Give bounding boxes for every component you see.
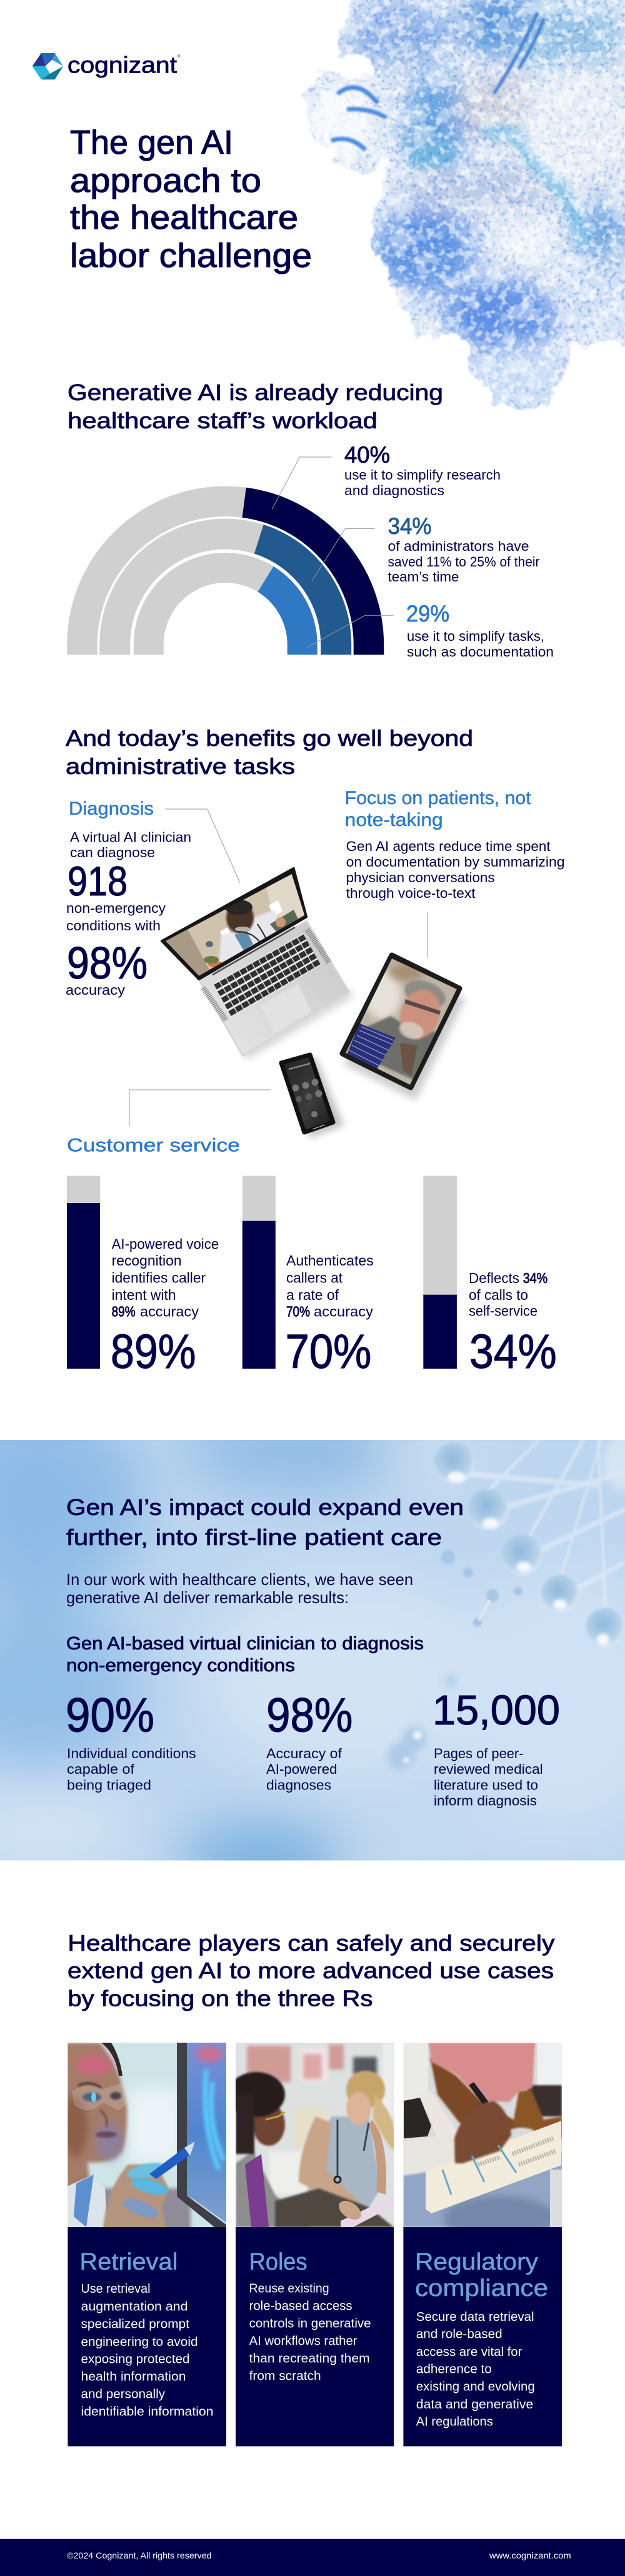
stat: 98% accuracy: AI-powered xyxy=(266,1761,338,1777)
panel: retrieval: exposing protected xyxy=(81,2353,190,2367)
stat: 29% xyxy=(406,601,554,660)
callout: focus on patients: note-taking xyxy=(345,810,443,830)
photo: clinician with patient xyxy=(228,2043,395,2227)
bar chart: 89% voice recognition: AI-powered voice xyxy=(112,1236,219,1252)
stat: 34% xyxy=(388,513,540,585)
bar chart: 70% authentication: Authenticates xyxy=(286,1252,374,1269)
inner ring: 29% xyxy=(134,553,318,655)
bar chart: 70% authentication: 70% xyxy=(286,1325,371,1379)
leader line: focus on patients xyxy=(427,912,428,958)
bar chart: 34% deflection: 34% xyxy=(523,1270,548,1286)
bar chart: 89% voice recognition: 89% xyxy=(111,1325,196,1379)
callout: diagnosis: accuracy xyxy=(66,982,125,998)
panel: roles: role-based access xyxy=(249,2300,352,2313)
subheading: virtual clinician: non-emergency conditions xyxy=(66,1656,295,1676)
panel: retrieval: identifiable information xyxy=(81,2405,214,2419)
leader line: customer service xyxy=(129,1090,271,1126)
bar chart: 89% voice recognition: intent with xyxy=(112,1287,176,1303)
panel: roles: controls in generative xyxy=(249,2317,371,2331)
heading: first-line patient care: Gen AI’s impact could expand even xyxy=(66,1494,464,1520)
panel: regulatory compliance: Regulatory xyxy=(415,2249,538,2275)
bar chart: 89% voice recognition: accuracy xyxy=(140,1304,199,1320)
subheading: customer service: Customer service xyxy=(67,1135,240,1156)
heading: benefits: administrative tasks xyxy=(66,753,295,779)
bar chart: 89% voice recognition: identifies caller xyxy=(112,1270,206,1286)
panel: retrieval xyxy=(68,2227,226,2446)
panel: retrieval: and personally xyxy=(81,2388,165,2402)
image: tablet with patient xyxy=(342,955,466,1100)
panel: roles: from scratch xyxy=(249,2370,321,2383)
stat: 40%: and diagnostics xyxy=(344,483,444,498)
stat: 98% accuracy: Accuracy of xyxy=(266,1746,342,1761)
panel: retrieval: Use retrieval xyxy=(81,2282,150,2296)
stat: 34%: 34% xyxy=(388,513,431,539)
panel: retrieval: Retrieval xyxy=(80,2249,178,2275)
subheading: virtual clinician: Gen AI-based virtual clinician to diagnosis xyxy=(66,1634,424,1654)
title: The gen AI xyxy=(70,124,233,161)
bar chart: 89% voice recognition: 89% xyxy=(112,1304,136,1320)
panel: regulatory compliance: existing and evolving xyxy=(416,2380,535,2394)
stat: 90% triaged: capable of xyxy=(67,1761,135,1777)
bar chart: 89% voice recognition: recognition xyxy=(112,1252,182,1269)
chart: concentric half-donut xyxy=(67,486,384,655)
heading: first-line patient care: further, into first-line patient care xyxy=(66,1524,442,1550)
callout: diagnosis: 918 xyxy=(68,858,128,904)
callout: focus on patients: Gen AI agents reduce time spent xyxy=(346,838,551,854)
bar chart: 34% deflection: 34% xyxy=(469,1325,557,1379)
stat: 40% xyxy=(344,442,501,498)
panel: first-line patient care background xyxy=(0,1440,625,1861)
title: the healthcare xyxy=(70,199,298,236)
stat: 98% accuracy xyxy=(266,1688,352,1793)
stat: 90% triaged: being triaged xyxy=(67,1777,151,1793)
photo: researcher at screen xyxy=(62,2043,226,2232)
heading: benefits xyxy=(66,725,473,779)
stat: 40%: 40% xyxy=(344,442,390,468)
callout: diagnosis: A virtual AI clinician xyxy=(70,829,191,845)
panel: regulatory compliance: data and generative xyxy=(416,2398,533,2412)
stat: 34%: of administrators have xyxy=(388,538,529,554)
title: approach to xyxy=(70,162,261,199)
stat: 90% triaged: 90% xyxy=(66,1688,154,1742)
heading: three Rs: Healthcare players can safely and securely xyxy=(68,1930,554,1956)
panel: regulatory compliance: adherence to xyxy=(416,2363,492,2377)
callout: diagnosis: non-emergency xyxy=(66,900,166,916)
bar chart: 70% authentication xyxy=(242,1176,374,1379)
icon: hexagon mark xyxy=(32,53,63,79)
panel: regulatory compliance: access are vital for xyxy=(416,2345,522,2359)
stat: 15,000 pages: 15,000 xyxy=(432,1687,560,1734)
laptop screen xyxy=(166,872,306,976)
patient notes overlay xyxy=(347,1024,396,1069)
stat: 15,000 pages xyxy=(432,1687,560,1808)
logo: Cognizant: cognizant xyxy=(68,53,178,78)
callout: focus on patients: Focus on patients, not xyxy=(345,788,531,808)
laptop keyboard xyxy=(214,933,321,1017)
subheading: virtual clinician xyxy=(66,1634,424,1676)
stat: 15,000 pages: Pages of peer- xyxy=(434,1746,524,1761)
middle ring: 34% xyxy=(99,519,351,655)
callout: focus on patients: physician conversations xyxy=(346,870,495,885)
panel: regulatory compliance: compliance xyxy=(415,2275,548,2302)
bar chart: 70% authentication: 70% xyxy=(286,1304,310,1320)
title: labor challenge xyxy=(70,237,312,274)
bar chart: 34% deflection: of calls to xyxy=(469,1287,528,1303)
heading: workload: healthcare staff’s workload xyxy=(68,408,378,433)
stat: 98% accuracy: diagnoses xyxy=(266,1777,331,1793)
heading: three Rs: by focusing on the three Rs xyxy=(68,1986,372,2011)
stat: 90% triaged: Individual conditions xyxy=(67,1746,196,1761)
callout: focus on patients: on documentation by summarizing xyxy=(346,854,565,870)
stat: 15,000 pages: inform diagnosis xyxy=(434,1793,537,1808)
panel: regulatory compliance: Secure data retrieval xyxy=(416,2310,534,2324)
stat: 34%: team’s time xyxy=(388,569,459,585)
bar chart: 70% authentication: accuracy xyxy=(314,1304,374,1320)
stat: 40%: use it to simplify research xyxy=(344,467,501,483)
panel: regulatory compliance xyxy=(403,2227,562,2446)
image: laptop with doctor on video call xyxy=(161,868,353,1060)
panel: roles: Reuse existing xyxy=(249,2282,329,2295)
image: phone call screen xyxy=(281,1055,344,1138)
laptop trackpad xyxy=(261,984,311,1033)
bar chart: 34% deflection: self-service xyxy=(469,1303,538,1319)
stat: 29%: 29% xyxy=(406,601,449,626)
outer ring: 40% xyxy=(67,486,384,655)
footer: www.cognizant.com xyxy=(489,2550,571,2560)
panel: roles: Roles xyxy=(249,2249,308,2275)
heading: three Rs: extend gen AI to more advanced use cases xyxy=(68,1958,554,1983)
logo: Cognizant: ® xyxy=(178,54,181,59)
bar chart: 70% authentication: a rate of xyxy=(286,1287,339,1303)
panel: roles xyxy=(236,2227,394,2446)
panel: roles: than recreating them xyxy=(249,2352,370,2366)
stat: 98% accuracy: 98% xyxy=(266,1688,352,1742)
bar chart: 89% voice recognition xyxy=(67,1176,219,1379)
panel: roles: AI workflows rather xyxy=(249,2335,358,2348)
footer xyxy=(0,2539,625,2576)
callout: diagnosis: conditions with xyxy=(66,918,161,933)
panel: retrieval: augmentation and xyxy=(81,2300,188,2314)
footer: ©2024 Cognizant, All rights reserved xyxy=(67,2550,211,2560)
callout: diagnosis: 98% xyxy=(67,938,148,989)
leader line: 34% xyxy=(312,528,375,581)
panel: regulatory compliance: and role-based xyxy=(416,2328,502,2342)
tablet screen xyxy=(346,958,457,1085)
stat: 90% triaged xyxy=(66,1688,196,1793)
callout: focus on patients: through voice-to-text xyxy=(346,885,476,901)
logo: Cognizant xyxy=(32,53,181,79)
stat: 29%: such as documentation xyxy=(407,644,554,660)
heading: three Rs xyxy=(68,1930,554,2011)
bar chart: 70% authentication: callers at xyxy=(286,1270,343,1286)
text block: intro: generative AI deliver remarkable results: xyxy=(66,1588,349,1607)
stat: 15,000 pages: literature used to xyxy=(434,1777,538,1793)
callout: diagnosis: can diagnose xyxy=(70,845,155,860)
heading: first-line patient care xyxy=(66,1494,464,1550)
stat: 29%: use it to simplify tasks, xyxy=(407,628,544,644)
panel: retrieval: engineering to avoid xyxy=(81,2335,198,2349)
panel: retrieval: specialized prompt xyxy=(81,2318,189,2332)
callout: diagnosis: Diagnosis xyxy=(69,798,154,819)
callout: diagnosis xyxy=(66,798,191,998)
heading: workload: Generative AI is already reducing xyxy=(68,380,443,405)
hero image: blue particle splash xyxy=(301,0,625,411)
callout: focus on patients xyxy=(345,788,565,901)
molecule spheres and rods xyxy=(387,1435,625,1770)
stat: 34%: saved 11% to 25% of their xyxy=(388,554,540,570)
text block: intro xyxy=(66,1570,413,1607)
title xyxy=(70,124,312,274)
panel: retrieval: health information xyxy=(81,2370,186,2383)
heading: workload xyxy=(68,380,443,433)
photo: hand filling form xyxy=(403,2043,562,2241)
bar chart: 34% deflection xyxy=(423,1176,557,1379)
leader line: 40% xyxy=(272,457,332,510)
leader line: 29% xyxy=(306,615,394,648)
panel: regulatory compliance: AI regulations xyxy=(416,2415,493,2429)
leader line: diagnosis xyxy=(166,809,240,883)
stat: 15,000 pages: reviewed medical xyxy=(434,1761,543,1777)
heading: benefits: And today’s benefits go well beyond xyxy=(66,725,473,751)
text block: intro: In our work with healthcare clients, we have seen xyxy=(66,1570,413,1589)
bar chart: 34% deflection: Deflects xyxy=(469,1270,519,1286)
